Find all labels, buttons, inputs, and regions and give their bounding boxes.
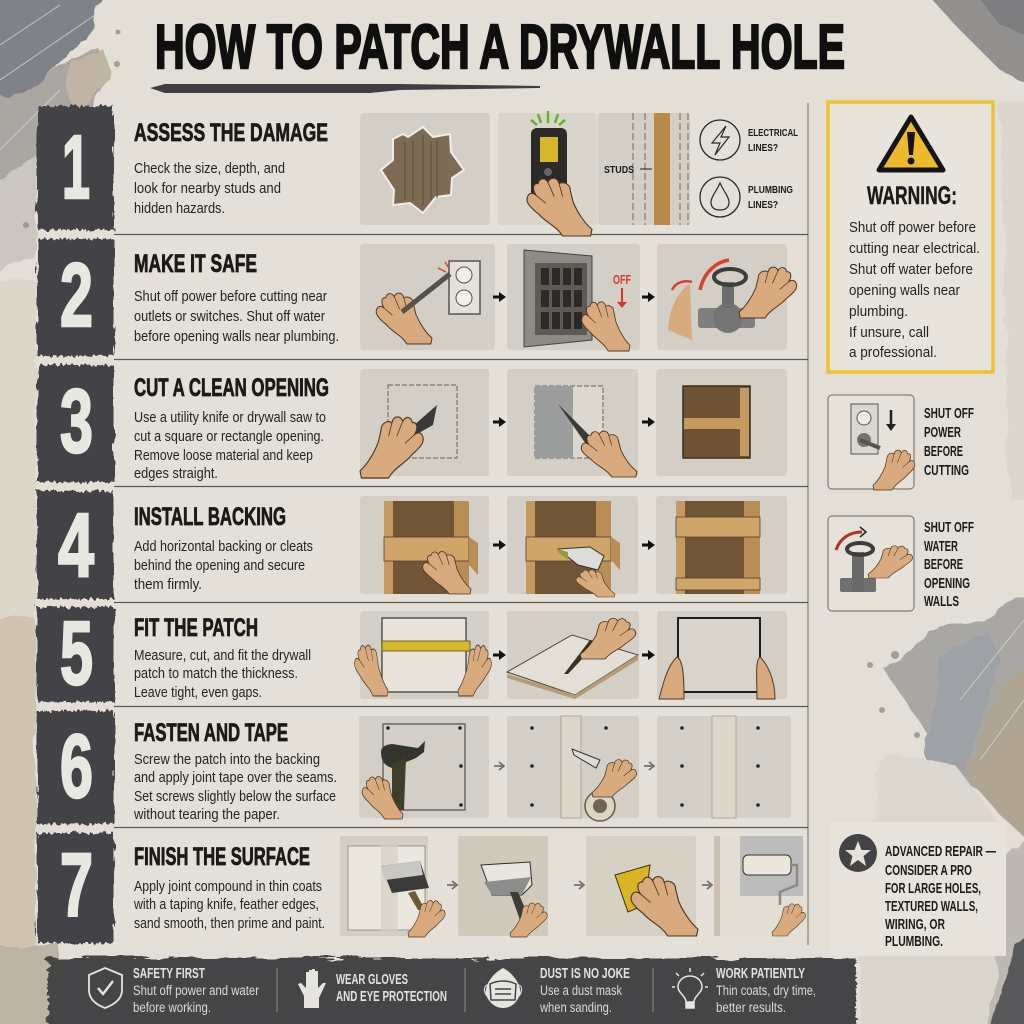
- description: Apply joint compound in thin coats: [134, 879, 322, 895]
- arrow: [574, 881, 584, 889]
- step 6: [37, 711, 791, 824]
- dust mask: Use a dust mask: [540, 983, 622, 998]
- arrow: [702, 881, 712, 889]
- description: Check the size, depth, and: [134, 161, 285, 177]
- arrow: [493, 292, 506, 302]
- number 6: 6: [60, 717, 93, 817]
- description: [134, 648, 311, 701]
- illustration: scoring patch: [507, 611, 639, 699]
- description: Shut off power before cutting near: [134, 289, 327, 305]
- description: [134, 289, 339, 345]
- illustration: cutting opening: [507, 369, 638, 477]
- illustration: holding backing: [360, 496, 489, 594]
- illustration: driving screws: [359, 716, 489, 819]
- arrow: [493, 540, 506, 550]
- title underline brush stroke: [150, 84, 540, 93]
- illustration: testing outlet: [360, 244, 495, 350]
- step 7: [37, 833, 805, 943]
- illustration: stud finder: [498, 111, 597, 236]
- description: [133, 879, 325, 932]
- number 7: [37, 833, 114, 943]
- illustration: breaker panel: [507, 244, 640, 351]
- arrow: [494, 762, 504, 770]
- description: Remove loose material and keep: [134, 448, 313, 464]
- warning text: [849, 220, 980, 361]
- label: WATER: [924, 538, 958, 555]
- illustration: installed backing: [656, 496, 787, 594]
- number 4: [37, 491, 114, 599]
- description: hidden hazards.: [134, 201, 225, 217]
- illustration: hole in wall: [360, 113, 490, 225]
- dust mask: when sanding.: [539, 1000, 612, 1015]
- arrow: [493, 417, 506, 427]
- number 2: 2: [60, 246, 93, 346]
- work patiently: [672, 966, 816, 1015]
- illustration: painting roller: [714, 836, 805, 936]
- illustration: valve and hand: [828, 516, 914, 611]
- shut off power card: [828, 395, 974, 490]
- illustration: applying compound: [340, 836, 445, 937]
- label: SHUT OFF: [924, 519, 974, 536]
- number 5: 5: [60, 604, 93, 704]
- step 3: [37, 365, 787, 482]
- label: SHUT OFF: [924, 405, 974, 422]
- description: Measure, cut, and fit the drywall: [134, 648, 311, 664]
- description: them firmly.: [134, 577, 202, 593]
- description: Set screws slightly below the surface: [134, 789, 336, 805]
- warning text: Shut off water before: [849, 262, 973, 278]
- illustration: clean opening: [656, 369, 787, 476]
- icon: warning triangle: [879, 117, 943, 170]
- description: with a taping knife, feather edges,: [133, 897, 319, 913]
- description: [133, 752, 337, 823]
- note text: PLUMBING.: [885, 933, 943, 950]
- shut off water card: [828, 516, 974, 611]
- number 1: [37, 106, 114, 230]
- illustration: taping seams: [507, 716, 639, 821]
- label: BEFORE: [924, 443, 963, 460]
- description: [134, 410, 326, 482]
- warning text: Shut off power before: [849, 220, 976, 236]
- work patiently: Thin coats, dry time,: [716, 983, 816, 998]
- label: WALLS: [924, 593, 959, 610]
- warning callout: [828, 102, 993, 372]
- dust mask: DUST IS NO JOKE: [540, 966, 630, 982]
- number 3: [37, 365, 114, 482]
- illustration: breaker panel: OFF: [613, 272, 631, 287]
- icon: plumbing lines: LINES?: [748, 199, 778, 211]
- description: [134, 161, 285, 217]
- warning text: If unsure, call: [849, 325, 929, 341]
- illustration: outlet and hand: [828, 395, 915, 490]
- wear gloves: AND EYE PROTECTION: [336, 989, 447, 1005]
- description: patch to match the thickness.: [134, 666, 298, 682]
- advanced repair note: [839, 834, 996, 950]
- safety first: [89, 966, 259, 1015]
- warning text: plumbing.: [849, 304, 908, 320]
- arrow: [642, 650, 655, 660]
- description: look for nearby studs and: [134, 181, 281, 197]
- work patiently: WORK PATIENTLY: [716, 966, 805, 982]
- description: sand smooth, then prime and paint.: [134, 916, 325, 932]
- icon: electrical lines: [700, 120, 798, 160]
- note text: [885, 843, 996, 950]
- icon: plumbing lines: [700, 177, 793, 217]
- arrow: [642, 292, 655, 302]
- illustration: studs: [598, 113, 690, 225]
- label: [924, 519, 974, 610]
- illustration: studs: STUDS: [604, 164, 634, 176]
- description: Screw the patch into the backing: [134, 752, 320, 768]
- heading: MAKE IT SAFE: [134, 250, 257, 278]
- illustration: water valve: [657, 244, 797, 350]
- number 4: 4: [58, 496, 94, 596]
- number 5: [37, 604, 114, 704]
- safety first: Shut off power and water: [133, 983, 259, 998]
- number 6: [37, 711, 114, 824]
- arrow: [642, 540, 655, 550]
- wear gloves: WEAR GLOVES: [336, 972, 408, 988]
- icon: electrical lines: ELECTRICAL: [748, 127, 798, 139]
- dust mask: [484, 966, 630, 1015]
- description: Add horizontal backing or cleats: [134, 539, 313, 555]
- safety first: before working.: [133, 1000, 211, 1015]
- illustration: fitting patch: [657, 611, 787, 699]
- warning text: opening walls near: [849, 283, 960, 299]
- step 2: [37, 239, 797, 356]
- work patiently: better results.: [716, 1000, 786, 1015]
- description: edges straight.: [134, 466, 218, 482]
- heading: FINISH THE SURFACE: [134, 843, 310, 871]
- main steps panel: [114, 103, 808, 945]
- footer banner: [48, 958, 856, 1024]
- safety first: SAFETY FIRST: [133, 966, 205, 982]
- description: cut a square or rectangle opening.: [134, 429, 324, 445]
- label: OPENING: [924, 575, 970, 592]
- number 1: 1: [62, 118, 90, 218]
- heading: FASTEN AND TAPE: [134, 719, 288, 747]
- illustration: drilling backing: [507, 496, 638, 597]
- wear gloves: [298, 969, 447, 1008]
- description: Use a utility knife or drywall saw to: [134, 410, 326, 426]
- illustration: taped patch: [657, 716, 791, 818]
- illustration: sanding: [586, 836, 698, 936]
- number 7: 7: [60, 836, 93, 936]
- description: Leave tight, even gaps.: [134, 685, 262, 701]
- illustration: marking cut: [360, 369, 489, 478]
- label: BEFORE: [924, 556, 963, 573]
- number 3: 3: [60, 372, 93, 472]
- arrow: [642, 417, 655, 427]
- number 2: [37, 239, 114, 356]
- illustration: feathering compound: [458, 836, 548, 937]
- heading: ASSESS THE DAMAGE: [134, 119, 328, 147]
- heading: CUT A CLEAN OPENING: [134, 374, 329, 402]
- label: [924, 405, 974, 479]
- note text: TEXTURED WALLS,: [885, 898, 978, 915]
- step 1: [37, 106, 798, 236]
- label: CUTTING: [924, 462, 969, 479]
- icon: plumbing lines: PLUMBING: [748, 184, 793, 196]
- description: outlets or switches. Shut off water: [134, 309, 325, 325]
- description: and apply joint tape over the seams.: [134, 770, 337, 786]
- warning text: cutting near electrical.: [849, 241, 980, 257]
- description: before opening walls near plumbing.: [134, 329, 339, 345]
- arrow: [493, 650, 506, 660]
- heading: FIT THE PATCH: [134, 614, 258, 642]
- description: behind the opening and secure: [134, 558, 305, 574]
- description: [134, 539, 313, 593]
- warning text: a professional.: [849, 345, 937, 361]
- warning heading: WARNING:: [867, 182, 957, 210]
- icon: star badge: [839, 834, 877, 872]
- heading: INSTALL BACKING: [134, 503, 286, 531]
- step 4: [37, 491, 787, 599]
- note text: CONSIDER A PRO: [885, 862, 972, 879]
- illustration: measuring patch: [355, 611, 491, 699]
- note text: WIRING, OR: [885, 916, 945, 933]
- arrow: [447, 881, 457, 889]
- label: POWER: [924, 424, 961, 441]
- icon: electrical lines: LINES?: [748, 142, 778, 154]
- description: without tearing the paper.: [133, 807, 280, 823]
- arrow: [644, 762, 654, 770]
- step 5: [37, 604, 787, 704]
